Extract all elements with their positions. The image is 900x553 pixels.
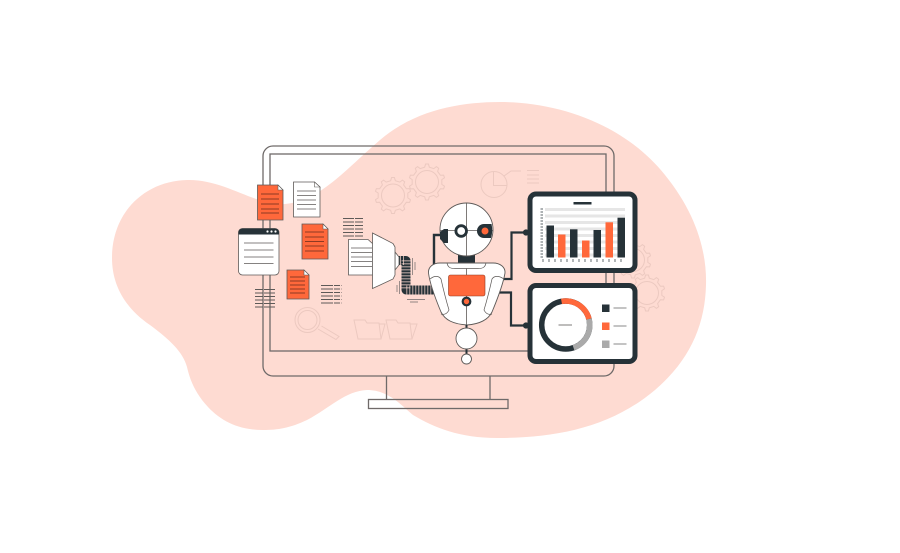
background icon: right gears — [616, 242, 664, 311]
robot — [428, 203, 505, 364]
legend — [602, 304, 626, 348]
orange document bottom — [287, 270, 309, 299]
background icon: gears — [376, 164, 444, 213]
robot head — [440, 203, 493, 256]
document entering scanner — [348, 240, 373, 275]
background blob — [112, 102, 706, 438]
text lines top — [343, 218, 364, 236]
orange document top — [258, 185, 283, 220]
robotic arm — [397, 258, 434, 302]
text lines right — [321, 286, 342, 303]
bars — [546, 218, 625, 258]
monitor — [263, 146, 614, 408]
robot ear and wire — [434, 229, 448, 265]
background icon: pie chart — [481, 170, 539, 198]
donut — [542, 301, 590, 349]
panel: donut chart — [530, 286, 635, 362]
chart title — [574, 202, 592, 204]
grid lines — [545, 208, 625, 256]
robot neck — [458, 255, 475, 264]
scanner funnel — [372, 233, 399, 288]
panel: bar chart — [530, 194, 635, 270]
text lines left — [255, 290, 275, 307]
axis ticks — [540, 209, 621, 262]
background icon: magnifier — [295, 308, 339, 340]
orange document middle — [302, 224, 328, 259]
browser window — [238, 228, 279, 275]
robot lower joints — [456, 325, 477, 364]
robot torso — [428, 263, 505, 325]
wires from robot to panels — [498, 230, 528, 328]
white document top — [294, 182, 320, 217]
background icon: folders — [354, 320, 417, 339]
